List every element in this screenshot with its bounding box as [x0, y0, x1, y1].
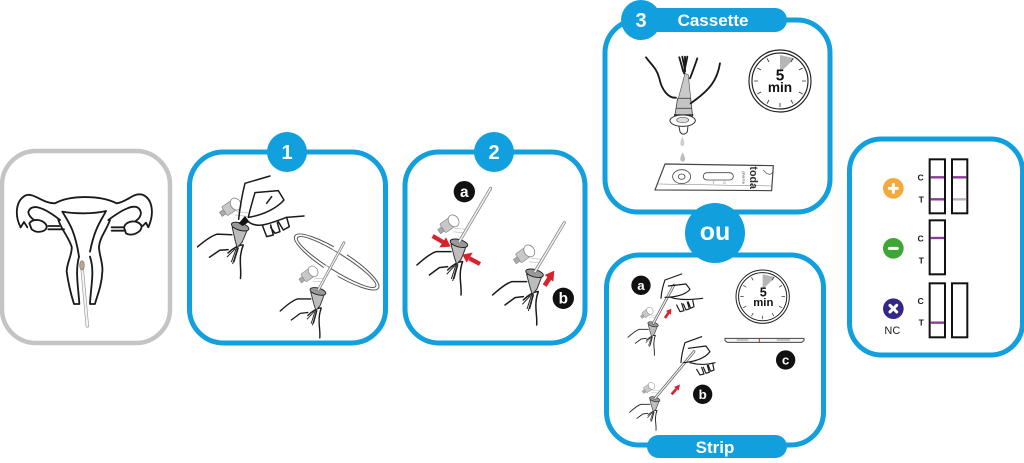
badge: step 1: [267, 132, 307, 172]
panel: step 1: [190, 132, 386, 343]
badge: ou: [685, 203, 745, 263]
group: positive result: T: [919, 194, 925, 204]
icon: timer 5 min: min: [768, 80, 792, 95]
illustration: spinning the swab: [280, 226, 385, 338]
illustration: step 2a squeeze: [417, 181, 491, 295]
panel: results: [850, 139, 1022, 355]
group: positive result: [883, 159, 967, 213]
illustration: test cassette: [655, 164, 773, 191]
panel: step 2: [405, 132, 585, 343]
group: negative result: C: [918, 233, 925, 243]
illustration: pulling the swab: [196, 176, 304, 279]
group: invalid result: T: [919, 318, 925, 328]
badge: ou: ou: [700, 218, 730, 246]
illustration: step 2b remove: [493, 223, 574, 325]
icon: timer 5 min: 5: [776, 68, 785, 85]
icon: strip timer 5 min: 5: [760, 286, 767, 300]
group: invalid result: [883, 283, 967, 337]
group: negative result: [883, 220, 945, 274]
group: negative result: T: [919, 255, 925, 265]
illustration: test cassette: pharma: [742, 171, 746, 185]
heading: strip: Strip: [696, 438, 734, 457]
icon: strip timer 5 min: min: [753, 297, 773, 309]
illustration: dropper: [646, 57, 720, 162]
illustration: test strip: c: [782, 353, 790, 368]
illustration: strip step a: [628, 274, 703, 355]
badge: step 2: 2: [488, 142, 500, 164]
illustration: test cassette: toda: [747, 166, 759, 189]
group: invalid result: NC: [884, 325, 900, 337]
icon: strip timer 5 min: [736, 270, 789, 323]
panel: step 3 strip: [606, 255, 824, 458]
illustration: strip step b: [630, 337, 715, 430]
icon: uterus with swab: [17, 194, 152, 326]
illustration: step 2a squeeze: a: [460, 184, 469, 201]
panel: step 3 cassette: [605, 0, 830, 212]
badge: step 2: [474, 132, 514, 172]
illustration: test cassette: T: [713, 181, 715, 185]
heading: cassette: 3: [635, 10, 647, 32]
illustration: step 2b remove: b: [559, 291, 568, 308]
group: invalid result: C: [918, 296, 925, 306]
badge: step 1: 1: [281, 142, 293, 164]
heading: strip: [647, 435, 787, 458]
heading: cassette: [621, 0, 787, 40]
panel: anatomy: [2, 151, 170, 343]
illustration: test cassette: C: [723, 181, 726, 185]
icon: timer 5 min: [749, 50, 811, 112]
illustration: strip step a: a: [637, 278, 645, 293]
group: positive result: C: [918, 172, 925, 182]
illustration: test strip: [725, 338, 804, 370]
illustration: strip step b: b: [699, 387, 707, 402]
heading: cassette: Cassette: [678, 11, 748, 30]
